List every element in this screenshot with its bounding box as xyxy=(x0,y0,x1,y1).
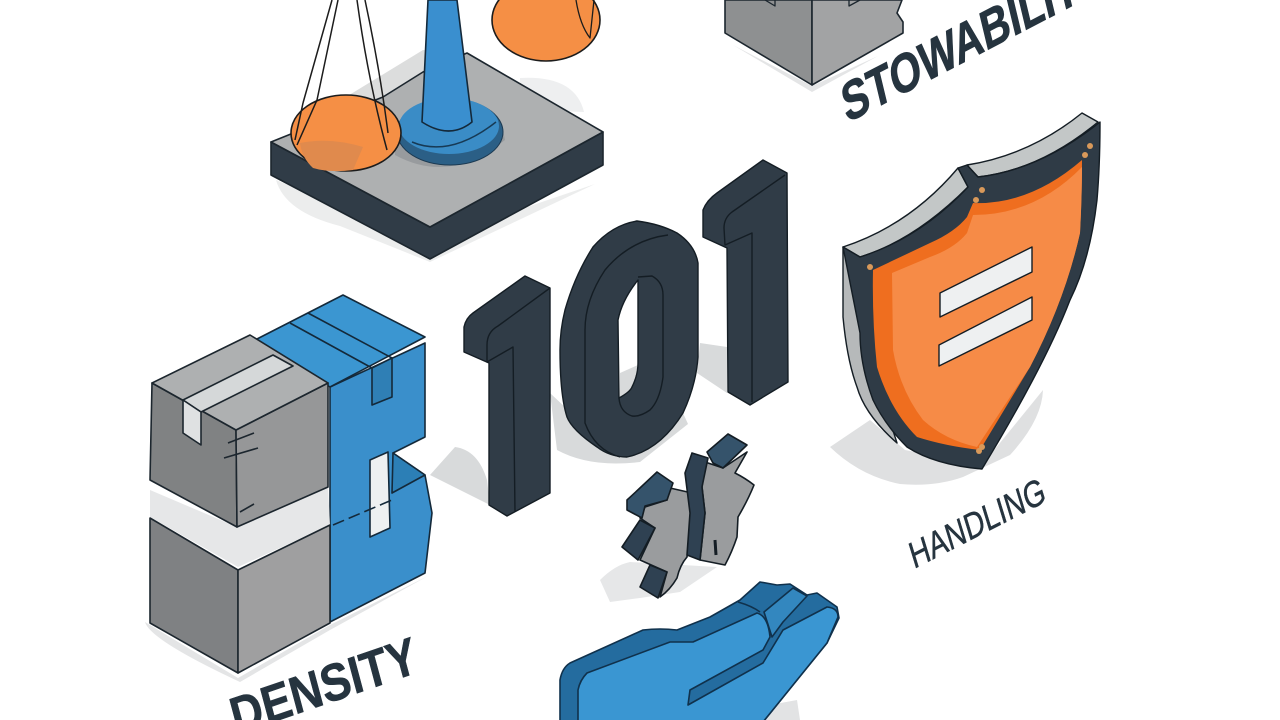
numeral 1 left xyxy=(464,276,550,516)
icon: shield (handling) xyxy=(830,113,1100,485)
left pan xyxy=(291,0,401,171)
icon: open hand xyxy=(560,582,839,720)
rivets xyxy=(867,143,1093,454)
icon: gear xyxy=(600,434,754,602)
scale base xyxy=(271,50,603,259)
shield frame xyxy=(843,122,1100,469)
icon: 101 numerals xyxy=(430,160,788,516)
icon: stowability box xyxy=(725,0,903,92)
equals bars xyxy=(939,247,1032,366)
grey upper box xyxy=(150,335,328,527)
label: handling: HANDLING xyxy=(904,469,1050,577)
icon: balance scale (density) xyxy=(271,0,603,262)
numeral 1 right xyxy=(703,160,788,405)
scale column xyxy=(397,0,503,165)
icon: stacked boxes xyxy=(145,295,432,682)
grey lower box xyxy=(150,487,330,673)
blue box xyxy=(255,295,432,622)
shield face xyxy=(873,160,1082,450)
right pan xyxy=(492,0,600,61)
numeral 0 xyxy=(560,221,698,457)
